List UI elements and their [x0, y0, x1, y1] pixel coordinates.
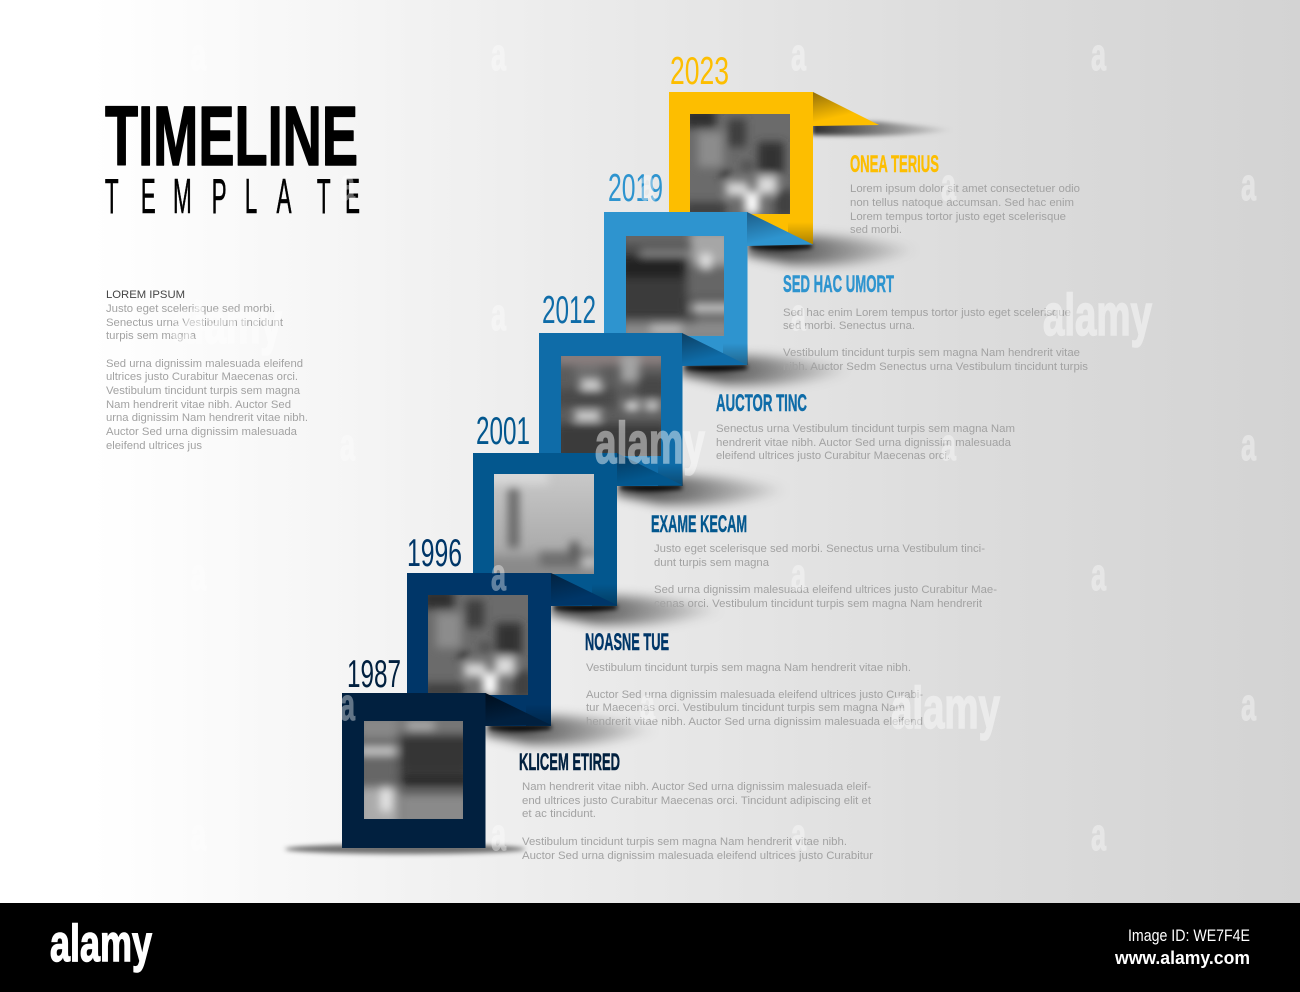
text block: Noasne Tue: NOASNE TUE	[585, 629, 669, 656]
year labels: 2012	[542, 289, 596, 332]
watermarks: a	[340, 679, 356, 730]
watermarks: a	[1241, 679, 1257, 730]
text block: Exame Kecam: Justo eget scelerisque sed morbi. Senectus urna Vestibulum tinci-	[654, 543, 985, 555]
watermarks: a	[640, 159, 656, 210]
text block: Noasne Tue	[585, 629, 923, 728]
year labels: 2019	[608, 167, 663, 210]
intro text block: Senectus urna Vestibulum tincidunt	[106, 317, 284, 329]
flag fold	[813, 92, 879, 126]
watermarks: a	[1091, 549, 1107, 600]
watermarks: alamy	[595, 411, 705, 476]
watermarks: alamy	[172, 291, 282, 356]
watermarks	[172, 29, 1257, 860]
text block: Onea Terius: non tellus natoque accumsan. Sed hac enim	[850, 197, 1074, 209]
watermarks: a	[791, 29, 807, 80]
watermarks: a	[491, 549, 507, 600]
step 1987 dark navy	[342, 693, 551, 848]
photo 2019	[626, 236, 724, 336]
intro text block: urna dignissim Nam hendrerit vitae nibh.	[106, 412, 308, 424]
text block: Exame Kecam: Sed urna dignissim malesuada eleifend ultrices justo Curabitur Mae-	[654, 584, 997, 596]
step 1996 navy	[407, 573, 617, 726]
watermarks: a	[1241, 159, 1257, 210]
year labels: 2023	[670, 50, 729, 93]
image id: Image ID: WE7F4E	[1128, 926, 1250, 945]
text block: Onea Terius: Lorem tempus tortor justo eget scelerisque	[850, 211, 1066, 223]
text block: Noasne Tue: Auctor Sed urna dignissim malesuada eleifend ultrices justo Curabi-	[586, 689, 923, 701]
text block: Exame Kecam: cenas orci. Vestibulum tincidunt turpis sem magna Nam hendrerit	[654, 598, 983, 610]
subtitle: TEMPLATE	[105, 169, 360, 225]
text block: Onea Terius: Lorem ipsum dolor sit amet consectetuer odio	[850, 183, 1080, 195]
title: TIMELINE	[105, 89, 358, 183]
text block: Auctor Tinc	[716, 390, 1015, 462]
watermarks: a	[1241, 419, 1257, 470]
footer bar	[0, 903, 1300, 992]
step 2019 light blue	[604, 212, 813, 365]
watermarks: a	[191, 29, 207, 80]
intro text block: Justo eget scelerisque sed morbi.	[106, 303, 275, 315]
text block: Auctor Tinc: AUCTOR TINC	[716, 390, 807, 417]
text block: Noasne Tue: hendrerit vitae nibh. Auctor Sed urna dignissim malesuada eleifend	[586, 716, 923, 728]
year labels: 1987	[347, 653, 401, 696]
year labels: 1996	[407, 532, 462, 575]
step 2023 yellow	[669, 92, 879, 244]
text block: Exame Kecam	[651, 511, 997, 610]
watermarks: a	[791, 289, 807, 340]
text block: Sed Hac Umort: nibh. Auctor Sedm Senectus urna Vestibulum tincidunt turpis	[783, 361, 1088, 373]
cast shadows under the steps	[285, 122, 955, 854]
watermarks: a	[640, 679, 656, 730]
intro text block: Nam hendrerit vitae nibh. Auctor Sed	[106, 399, 291, 411]
text block: Auctor Tinc: eleifend ultrices justo Curabitur Maecenas orci.	[716, 450, 950, 462]
text block: Exame Kecam: EXAME KECAM	[651, 511, 747, 538]
text block: Klicem Etired: et ac tincidunt.	[522, 808, 596, 820]
watermarks: a	[491, 29, 507, 80]
text block: Klicem Etired: Nam hendrerit vitae nibh. Auctor Sed urna dignissim malesuada eleif-	[522, 781, 871, 793]
intro text block: Sed urna dignissim malesuada eleifend	[106, 358, 303, 370]
watermarks: a	[791, 809, 807, 860]
watermarks: a	[791, 549, 807, 600]
text block: Onea Terius: sed morbi.	[850, 224, 902, 236]
fold	[617, 453, 682, 486]
text block: Auctor Tinc: hendrerit vitae nibh. Auctor Sed urna dignissim malesuada	[716, 437, 1012, 449]
watermarks: a	[1091, 29, 1107, 80]
photo 2001	[494, 474, 594, 574]
fold	[486, 693, 551, 726]
photo 1996	[428, 595, 528, 695]
watermarks: a	[491, 289, 507, 340]
step 2001 blue	[473, 453, 682, 606]
year labels	[347, 50, 729, 696]
fold	[747, 212, 813, 246]
website: www.alamy.com	[1114, 948, 1250, 968]
fold	[682, 333, 747, 366]
text block: Klicem Etired: end ultrices justo Curabitur Maecenas orci. Tincidunt adipiscing elit et	[522, 795, 872, 807]
text block: Auctor Tinc: Senectus urna Vestibulum tincidunt turpis sem magna Nam	[716, 423, 1015, 435]
text block: Klicem Etired	[519, 749, 873, 862]
photo 2012	[561, 356, 661, 456]
watermarks: a	[191, 289, 207, 340]
watermarks: a	[340, 419, 356, 470]
text block: Onea Terius	[850, 151, 1080, 236]
text block: Exame Kecam: dunt turpis sem magna	[654, 557, 770, 569]
intro text block: Vestibulum tincidunt turpis sem magna	[106, 385, 301, 397]
intro text block	[106, 289, 308, 452]
photo 2023	[690, 114, 790, 214]
footer logo: alamy	[50, 915, 152, 973]
title	[105, 89, 360, 225]
step 2012 mid blue	[539, 333, 747, 486]
watermarks: a	[1091, 809, 1107, 860]
text block: Sed Hac Umort	[783, 271, 1088, 373]
text block: Sed Hac Umort: sed morbi. Senectus urna.	[783, 320, 915, 332]
intro text block: LOREM IPSUM	[106, 289, 185, 301]
text block: Klicem Etired: KLICEM ETIRED	[519, 749, 620, 776]
text block: Noasne Tue: Vestibulum tincidunt turpis sem magna Nam hendrerit vitae nibh.	[586, 662, 911, 674]
watermarks: a	[191, 549, 207, 600]
intro text block: ultrices justo Curabitur Maecenas orci.	[106, 371, 298, 383]
watermarks: a	[941, 159, 957, 210]
text block: Onea Terius: ONEA TERIUS	[850, 151, 939, 178]
intro text block: eleifend ultrices jus	[106, 440, 202, 452]
text block: Sed Hac Umort: Sed hac enim Lorem tempus tortor justo eget scelerisque	[783, 307, 1071, 319]
text block: Sed Hac Umort: SED HAC UMORT	[783, 271, 894, 298]
watermarks: a	[941, 419, 957, 470]
watermarks: a	[340, 159, 356, 210]
year labels: 2001	[476, 410, 530, 453]
watermarks: alamy	[1043, 283, 1152, 348]
text block: Noasne Tue: tur Maecenas orci. Vestibulum tincidunt turpis sem magna Nam	[586, 702, 905, 714]
intro text block: Auctor Sed urna dignissim malesuada	[106, 426, 298, 438]
text block: Klicem Etired: Vestibulum tincidunt turpis sem magna Nam hendrerit vitae nibh.	[522, 836, 847, 848]
text block: Klicem Etired: Auctor Sed urna dignissim malesuada eleifend ultrices justo Curabitur	[522, 850, 873, 862]
text block: Sed Hac Umort: Vestibulum tincidunt turpis sem magna Nam hendrerit vitae	[783, 347, 1080, 359]
fold	[551, 573, 617, 606]
watermarks: alamy	[891, 676, 1000, 741]
watermarks: a	[191, 809, 207, 860]
watermarks: a	[491, 809, 507, 860]
photo 1987	[364, 721, 463, 819]
intro text block: turpis sem magna	[106, 330, 197, 342]
